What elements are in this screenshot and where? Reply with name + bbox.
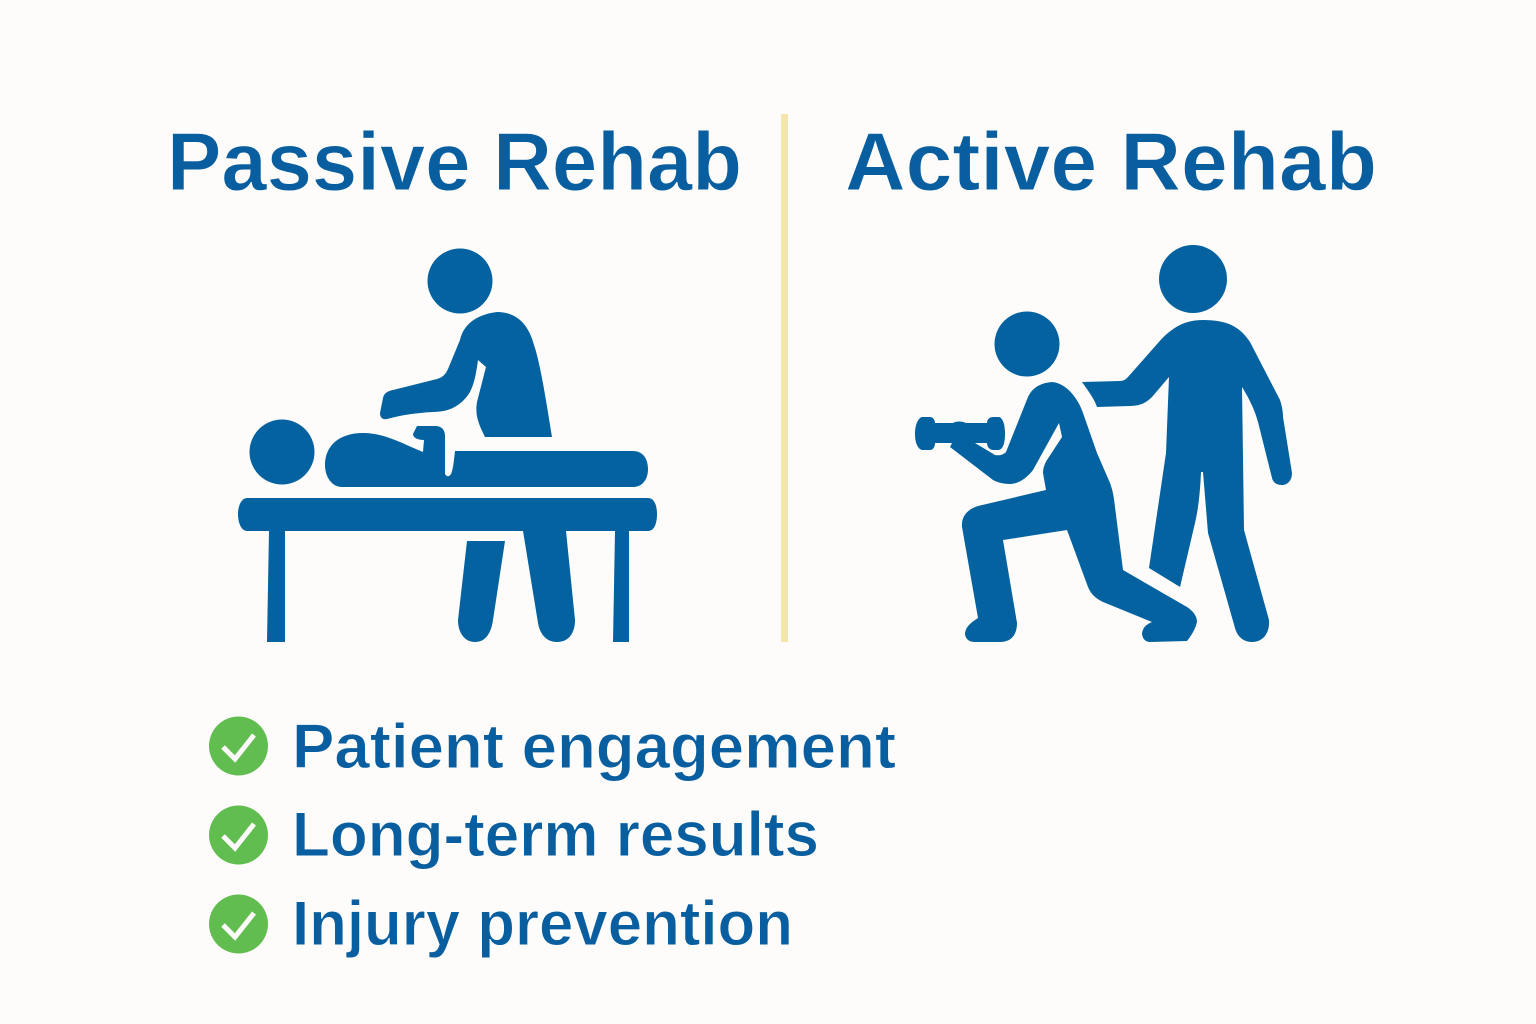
item: Long-term results: Long-term results	[292, 800, 819, 870]
item: Patient engagement: Patient engagement	[292, 712, 896, 782]
checklist: benefits	[209, 712, 896, 959]
icon: passive rehab therapist and patient on table	[238, 248, 657, 642]
icon: active rehab patient with dumbbell and therapist	[915, 245, 1292, 642]
item: Injury prevention: Injury prevention	[292, 889, 793, 959]
heading: Passive Rehab: Passive Rehab	[167, 115, 742, 208]
heading: Active Rehab: Active Rehab	[845, 115, 1377, 208]
center divider	[781, 114, 788, 642]
